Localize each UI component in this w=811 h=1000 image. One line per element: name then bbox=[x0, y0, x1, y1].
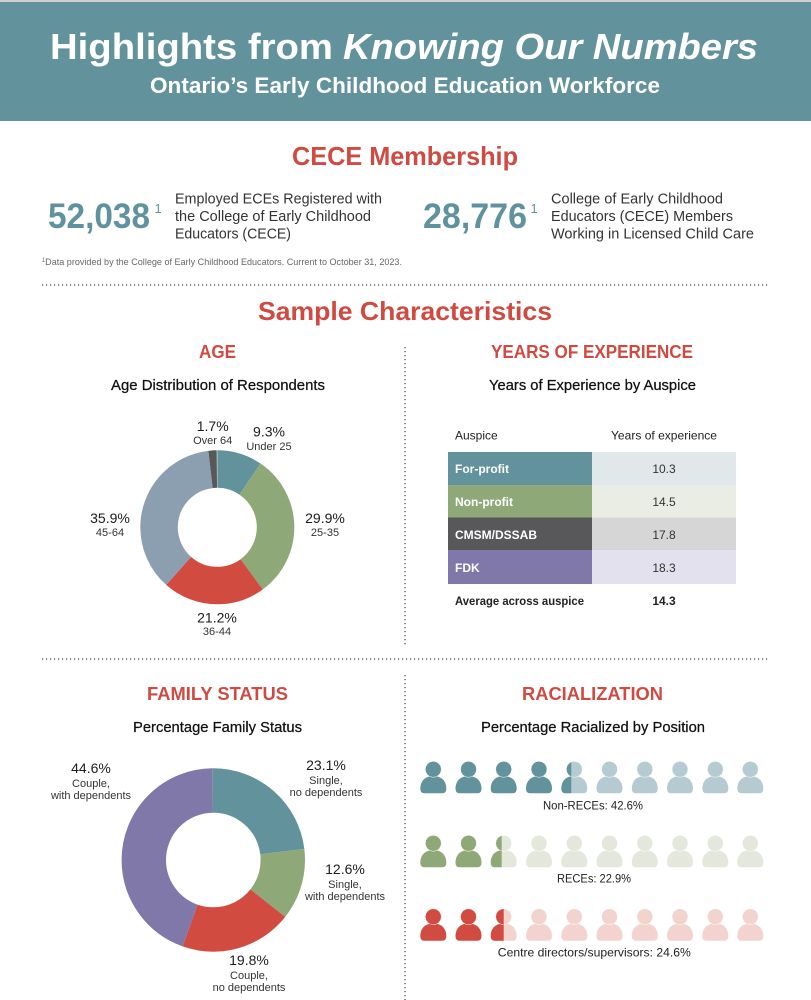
label: 25-35: 25-35 bbox=[311, 527, 339, 539]
label: 25-35: 29.9% bbox=[305, 510, 345, 526]
heading: years of experience: YEARS OF EXPERIENCE bbox=[491, 342, 693, 362]
stat: employed ECEs: Employed ECEs Registered with bbox=[175, 192, 382, 208]
table: experience by auspice: Auspice bbox=[455, 428, 498, 442]
subheading: experience by auspice: Years of Experience by Auspice bbox=[489, 378, 696, 394]
footnote: 1 bbox=[42, 258, 46, 264]
label: over 64: Over 64 bbox=[193, 435, 232, 447]
label: single no dependents bbox=[290, 757, 363, 799]
label: 45-64: 45-64 bbox=[96, 527, 124, 539]
header banner bbox=[0, 2, 811, 121]
label: single with dependents bbox=[304, 861, 386, 903]
label: 45-64 bbox=[90, 510, 130, 539]
pictogram: non-RECEs bbox=[420, 761, 763, 812]
subtitle: Ontario’s Early Childhood Education Workforce bbox=[150, 73, 660, 98]
stat: CECE members in licensed care: Working in Licensed Child Care bbox=[551, 226, 754, 242]
title: Knowing Our Numbers bbox=[343, 26, 758, 67]
label: 36-44: 21.2% bbox=[197, 610, 237, 626]
label: couple with dependents: 44.6% bbox=[71, 760, 111, 776]
table: experience by auspice bbox=[448, 428, 736, 608]
label: single no dependents: 23.1% bbox=[306, 757, 346, 773]
stat: CECE members in licensed care: 28,776 bbox=[423, 197, 527, 236]
table: experience by auspice: 17.8 bbox=[652, 528, 676, 542]
label: single no dependents: no dependents bbox=[290, 787, 363, 799]
label: single with dependents: 12.6% bbox=[325, 861, 365, 877]
label: couple with dependents: Couple, bbox=[72, 778, 110, 790]
table: experience by auspice: Non-profit bbox=[455, 495, 513, 509]
donut chart: age bbox=[159, 469, 276, 586]
label: couple with dependents: with dependents bbox=[50, 790, 132, 802]
label: 25-35 bbox=[305, 510, 345, 539]
label: 36-44: 36-44 bbox=[203, 626, 231, 638]
donut chart: family status bbox=[144, 790, 283, 930]
heading: CECE Membership: CECE Membership bbox=[292, 141, 518, 171]
heading: family status: FAMILY STATUS bbox=[147, 684, 288, 704]
table: experience by auspice: Years of experience bbox=[611, 428, 717, 442]
subheading: percentage family status: Percentage Family Status bbox=[133, 720, 302, 736]
pictogram: RECEs bbox=[420, 835, 763, 886]
stat: CECE members in licensed care: 1 bbox=[530, 201, 538, 216]
subheading: age distribution: Age Distribution of Respondents bbox=[111, 378, 325, 394]
pictogram: centre directors/supervisors: Centre directors/supervisors: 24.6% bbox=[498, 946, 691, 960]
label: 36-44 bbox=[197, 610, 237, 638]
pictogram: non-RECEs: Non-RECEs: 42.6% bbox=[543, 798, 643, 812]
table: experience by auspice: 10.3 bbox=[652, 462, 676, 476]
label: under 25: 9.3% bbox=[253, 424, 285, 440]
stat: CECE members in licensed care: Educators (CECE) Members bbox=[551, 209, 733, 225]
pictogram: centre directors/supervisors bbox=[420, 909, 763, 960]
label: couple no dependents: Couple, bbox=[230, 970, 268, 982]
label: couple with dependents bbox=[50, 760, 132, 802]
table: experience by auspice: Average across auspice bbox=[455, 594, 584, 608]
stat: employed ECEs: the College of Early Childhood bbox=[175, 209, 371, 225]
panel: years of experience bbox=[448, 342, 736, 608]
pictogram: RECEs: RECEs: 22.9% bbox=[557, 872, 631, 886]
table: experience by auspice: 14.3 bbox=[652, 594, 676, 608]
table: experience by auspice: 14.5 bbox=[652, 495, 676, 509]
panel: family status bbox=[50, 684, 386, 994]
table: experience by auspice: 18.3 bbox=[652, 561, 676, 575]
panel: racialization bbox=[420, 684, 763, 960]
label: couple no dependents: no dependents bbox=[213, 982, 286, 994]
label: over 64 bbox=[193, 418, 232, 447]
stat: employed ECEs bbox=[48, 192, 382, 242]
heading: age: AGE bbox=[199, 342, 236, 362]
label: couple no dependents bbox=[213, 952, 286, 994]
footnote: Data provided by the College of Early Childhood Educators. Current to October 31, 2023. bbox=[45, 257, 402, 268]
table: experience by auspice: FDK bbox=[455, 561, 480, 575]
label: single no dependents: Single, bbox=[309, 775, 343, 787]
panel: age bbox=[90, 342, 345, 638]
title: Highlights from bbox=[50, 26, 333, 67]
stat: employed ECEs: 52,038 bbox=[48, 197, 150, 236]
heading: Sample Characteristics: Sample Characteristics bbox=[258, 296, 552, 326]
table: experience by auspice: CMSM/DSSAB bbox=[455, 528, 537, 542]
table: experience by auspice: For-profit bbox=[455, 462, 509, 476]
subheading: percentage racialized: Percentage Racialized by Position bbox=[481, 720, 705, 736]
heading: racialization: RACIALIZATION bbox=[522, 684, 663, 704]
label: under 25: Under 25 bbox=[246, 441, 292, 453]
stat: employed ECEs: Educators (CECE) bbox=[175, 226, 291, 242]
label: over 64: 1.7% bbox=[197, 418, 229, 434]
stat: CECE members in licensed care bbox=[423, 192, 754, 242]
label: single with dependents: with dependents bbox=[304, 891, 386, 903]
label: single with dependents: Single, bbox=[328, 879, 362, 891]
stat: CECE members in licensed care: College of Early Childhood bbox=[551, 192, 723, 208]
label: couple no dependents: 19.8% bbox=[229, 952, 269, 968]
stat: employed ECEs: 1 bbox=[154, 201, 162, 216]
label: 45-64: 35.9% bbox=[90, 510, 130, 526]
title bbox=[50, 26, 758, 67]
label: under 25 bbox=[246, 424, 292, 453]
